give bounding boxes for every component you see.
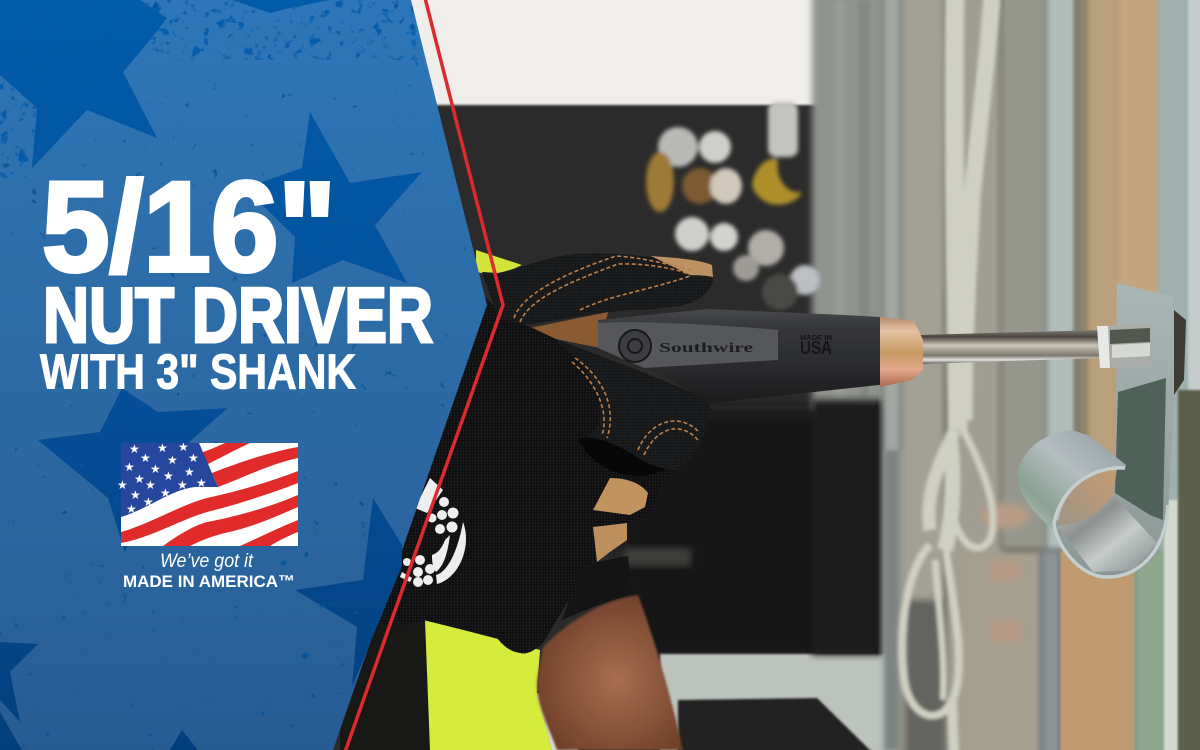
- hook opening: [1058, 468, 1117, 525]
- metal J-hook bracket: [1018, 283, 1186, 577]
- black handle: [598, 309, 888, 403]
- made in america badge: [117, 440, 298, 591]
- translucent amber handle end: [530, 312, 608, 348]
- shaft: [920, 330, 1100, 364]
- glove logo: [400, 478, 466, 587]
- flag stars: ★: [184, 465, 195, 479]
- flag stars: ★: [178, 440, 189, 454]
- hook lip: [1054, 468, 1168, 577]
- black work glove: [377, 253, 713, 653]
- blurred items on the back wall: [646, 102, 820, 310]
- flag stars: ★: [124, 460, 135, 474]
- flag stars: ★: [157, 441, 168, 455]
- background stars: [0, 0, 422, 750]
- shank subtitle: WITH 3" SHANK: [40, 346, 356, 400]
- vest lower piece: [425, 620, 552, 750]
- brand logo on handle: [619, 330, 753, 362]
- dark reflection on bracket: [1115, 378, 1166, 520]
- vest top piece: [476, 250, 522, 276]
- icon: american flag: [117, 440, 298, 546]
- flag stars: ★: [134, 472, 145, 486]
- palm and fingers: [377, 290, 710, 653]
- gripped knuckle panel: [555, 340, 710, 470]
- flag stars: ★: [130, 488, 141, 502]
- vest reflective strip: [537, 693, 578, 750]
- flag stars: ★: [129, 442, 140, 456]
- flag stars: ★: [143, 495, 154, 509]
- bracket shadow side: [1174, 310, 1186, 395]
- worker: hi-vis vest and arm: [340, 250, 683, 750]
- distressed texture: [0, 0, 490, 750]
- product name: NUT DRIVER: [43, 271, 433, 359]
- flag stars: ★: [126, 502, 137, 516]
- hook inner surface: [1058, 495, 1157, 572]
- flag stars: ★: [140, 451, 151, 465]
- blurred white rope: [902, 0, 993, 750]
- orange stitching: [514, 256, 699, 455]
- flag stars: ★: [167, 453, 178, 467]
- flag stars: ★: [163, 469, 174, 483]
- copper collar: [880, 317, 923, 387]
- size heading: 5/16": [42, 156, 336, 299]
- tan fingertip: top: [651, 256, 713, 277]
- forearm: [537, 595, 683, 750]
- blue title panel: [0, 0, 490, 750]
- finger knuckle fold: [578, 438, 666, 476]
- brand logo on handle: Southwire: [659, 341, 753, 356]
- upper finger: [482, 253, 713, 325]
- made in america text: MADE IN AMERICA™: [123, 572, 295, 591]
- dark shirt area: [340, 615, 430, 750]
- title: [40, 156, 433, 400]
- bracket plate: [1052, 283, 1174, 576]
- hollow hex nut: [1097, 324, 1151, 368]
- flag stars: ★: [160, 486, 171, 500]
- hook sleeve: [1018, 430, 1126, 530]
- made in USA mark: USA: [800, 338, 832, 358]
- sleeve: [562, 556, 632, 620]
- tan fingertip: middle: [593, 478, 648, 515]
- flag stars: ★: [117, 478, 128, 492]
- flag stars: ★: [177, 478, 188, 492]
- flag stars: ★: [196, 476, 207, 490]
- red chevron line: [345, 0, 503, 750]
- tan fingertip: lower: [593, 523, 627, 562]
- flag stars: ★: [188, 451, 199, 465]
- flag stars: ★: [145, 478, 156, 492]
- screwdriver: [530, 309, 1100, 403]
- made in USA mark: MADE IN: [800, 335, 832, 342]
- slogan: We’ve got it: [160, 551, 254, 572]
- flag stars: ★: [150, 462, 161, 476]
- grey handle grip: [598, 322, 778, 368]
- flag stars: [117, 440, 207, 516]
